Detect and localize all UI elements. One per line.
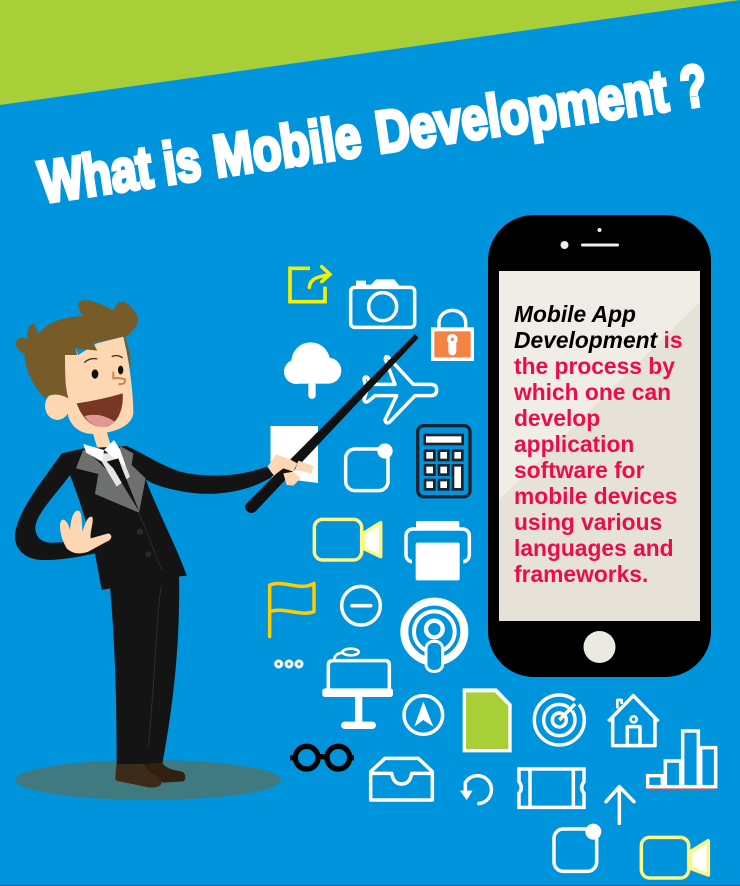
mouth [77,393,123,427]
icon: bar chart [647,731,716,789]
phone definition text: frameworks. [514,561,648,587]
neck [93,432,113,452]
front shoe [115,764,162,787]
shirt collar [83,440,130,487]
necktie [107,458,139,512]
businessman legs [109,573,185,787]
icon: cloud [284,342,341,399]
phone definition text: the process by [514,353,675,379]
icons lower group [290,688,716,878]
icon: glasses [290,746,354,769]
eyes [92,366,123,379]
icon: video camera lower [641,837,708,878]
back shoe [143,763,185,783]
title: ? [676,52,711,121]
title: Mobile [209,103,365,190]
title: Development [371,58,672,166]
icon: presentation screen [322,649,393,729]
phone definition text: mobile devices [514,483,677,509]
phone definition text: using various [514,509,662,535]
hair [16,300,138,398]
phone definition text: Mobile App [514,301,636,327]
green header band [0,0,740,105]
phone screen [499,271,700,621]
jacket [15,446,274,590]
paper held by businessman [270,426,318,483]
icon: notification square lower [554,824,601,871]
phone definition text: languages and [514,535,674,561]
raised left hand [60,511,111,553]
icon: minus circle [342,586,380,625]
icon: podcast [404,602,464,672]
icon: plane [364,357,437,423]
icon: dots [276,661,302,667]
businessman upper body [15,300,313,590]
icons middle group [270,519,469,734]
title: is [159,127,205,197]
icons upper group [284,267,474,497]
phone [488,215,711,677]
face [65,337,133,434]
phone definition text: application [514,431,634,457]
ground shadow [15,760,281,800]
title [35,52,711,216]
icon: compass [404,696,443,734]
right hand gripping stick [268,454,313,486]
icon: camera [351,279,415,327]
icon: share [290,267,330,302]
phone definition text: software for [514,457,645,483]
icon: video camera [314,519,381,560]
icon: up arrow [606,787,634,823]
ear [45,392,70,420]
pointer stick [245,334,418,513]
icon: radar [534,695,584,745]
home button [584,631,616,663]
phone definition text: develop [514,405,600,431]
nose [113,372,125,384]
icon: padlock [431,310,474,361]
icon: ticket [519,769,584,807]
icon: house [608,696,658,746]
icon: flag [270,583,314,637]
tongue [84,415,115,427]
phone definition text [513,301,683,587]
title: What [35,134,156,216]
phone definition text: which one can [513,379,671,405]
icon: inbox tray [371,758,432,800]
lapels [76,446,146,513]
jacket seam and buttons [137,513,162,570]
icon: calculator [418,426,470,497]
icon: refresh [460,776,491,804]
phone definition text: Development is [514,327,683,353]
icon: printer [406,521,469,580]
icon: notification square [346,443,393,491]
icon: document [463,688,512,752]
eyebrows [84,356,123,363]
